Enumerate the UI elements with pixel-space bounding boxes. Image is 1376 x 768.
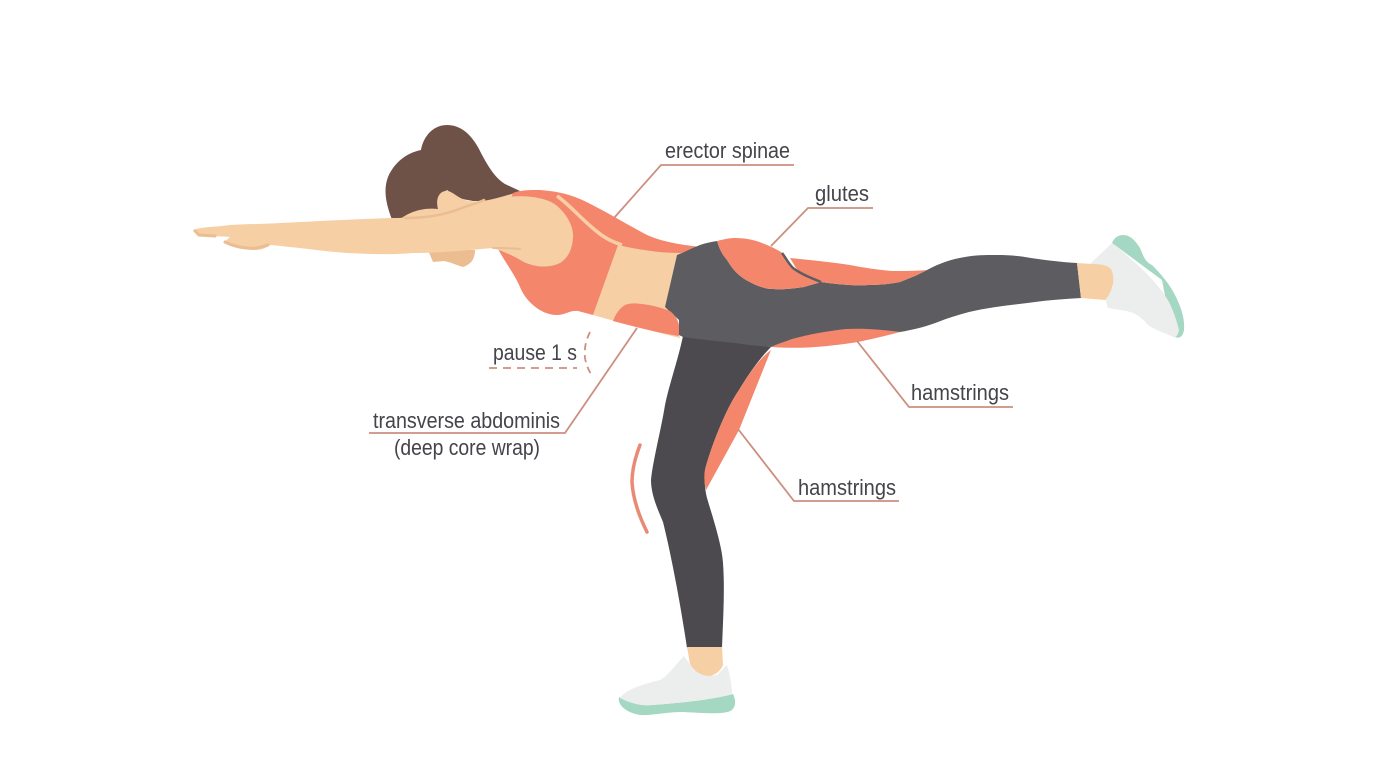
callout: glutes: glutes — [815, 181, 869, 206]
muscle: upper hamstrings — [790, 258, 927, 285]
callout: transverse abdominis — [369, 328, 637, 460]
callout: hamstrings upper: hamstrings — [911, 380, 1009, 405]
callout: hamstrings upper — [857, 341, 1013, 407]
upper — [1090, 243, 1179, 337]
callout: hamstrings lower: hamstrings — [798, 475, 896, 500]
callout: transverse abdominis: transverse abdominis — [373, 408, 560, 433]
strap — [557, 196, 622, 245]
upper — [620, 656, 732, 705]
figure — [193, 125, 1184, 715]
face — [428, 250, 475, 267]
muscle: glutes — [717, 238, 821, 289]
arm — [193, 196, 573, 267]
sole — [1112, 235, 1184, 338]
ear and neck — [397, 191, 540, 225]
shoe: raised foot — [1077, 235, 1184, 338]
pause annotation — [489, 332, 591, 374]
muscle: standing hamstrings — [704, 350, 771, 490]
muscle: lower hamstrings — [771, 329, 900, 348]
muscle: transverse abdominis — [613, 303, 679, 336]
leg: standing — [651, 336, 771, 648]
ankle — [1077, 263, 1113, 300]
callout: erector spinae — [614, 138, 794, 218]
arm shading — [195, 200, 520, 249]
callout: transverse abdominis: (deep core wrap) — [394, 435, 540, 460]
top: coral bra and erector spinae — [498, 190, 700, 315]
callout: hamstrings lower — [738, 429, 899, 501]
hair — [386, 125, 520, 224]
skin: torso midriff — [593, 244, 690, 338]
pause annotation: pause 1 s — [493, 340, 577, 365]
leg: raised with leggings — [665, 241, 1081, 347]
shoe: standing foot — [619, 647, 735, 715]
knee bend arc — [632, 445, 647, 532]
glute crease — [782, 253, 821, 282]
callout: glutes — [771, 181, 873, 246]
callout: erector spinae: erector spinae — [665, 138, 790, 163]
sole — [619, 694, 735, 715]
ankle — [687, 647, 723, 676]
